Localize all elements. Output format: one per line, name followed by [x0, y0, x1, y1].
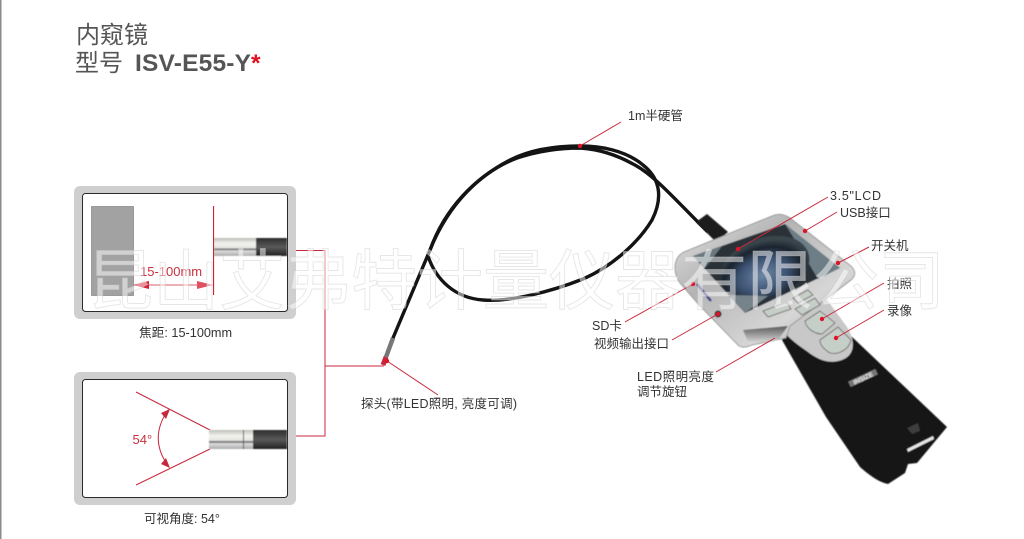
side port strip [697, 284, 711, 301]
side port [714, 310, 722, 318]
callout labels: USB接口 [840, 205, 891, 220]
brand badge [848, 369, 878, 388]
callout labels: LED照明亮度 [637, 369, 714, 384]
lower ledge [743, 326, 788, 344]
callout labels: 录像 [887, 304, 913, 318]
title: ISV-E55-Y [135, 50, 251, 77]
brand badge: INSIZE [852, 371, 875, 387]
panel: viewing angle [74, 372, 296, 505]
angle lines [136, 392, 210, 485]
semi-rigid cable [393, 146, 707, 338]
silver grip [783, 290, 853, 362]
distance arrow [133, 281, 213, 289]
callout labels: 开关机 [871, 239, 909, 253]
focal plane line [213, 206, 214, 295]
callout labels: 调节旋钮 [637, 384, 687, 399]
screen [693, 224, 840, 313]
silver body [675, 214, 855, 347]
callout lines [387, 122, 884, 395]
angle arrowheads [161, 409, 170, 468]
focal distance value: 15-100mm [140, 264, 202, 279]
callout dots [385, 144, 840, 363]
probe tip [383, 338, 393, 365]
target block [92, 206, 134, 296]
cable connector [696, 214, 728, 242]
callout labels: SD卡 [592, 319, 622, 333]
callout labels: 拍照 [887, 276, 912, 291]
probe side view [214, 238, 287, 256]
callout labels: 探头(带LED照明, 亮度可调) [361, 396, 517, 411]
callout labels: 视频输出接口 [594, 336, 669, 351]
caption: focal distance: 焦距: 15-100mm [139, 326, 232, 340]
handle [782, 312, 947, 484]
callout labels [361, 108, 913, 411]
angle value: 54° [132, 432, 152, 447]
probe front view [209, 430, 287, 449]
handle end slot [907, 436, 934, 452]
title: 型号 [75, 50, 123, 77]
title [75, 22, 261, 77]
screen image [693, 224, 840, 313]
device: inspection camera [675, 214, 947, 484]
caption: viewing angle: 可视角度: 54° [144, 511, 220, 526]
connector lines [296, 250, 384, 436]
panel: focal distance [74, 186, 296, 319]
page left edge [0, 0, 2, 539]
buttons [763, 290, 851, 353]
handle recess [907, 423, 920, 434]
watermark: 昆山艾弗特计量仪器有限公司 [87, 228, 945, 324]
callout labels: 1m半硬管 [628, 108, 683, 123]
title: * [251, 50, 261, 77]
callout labels: 3.5"LCD [830, 189, 881, 203]
title: 内窥镜 [76, 22, 148, 49]
